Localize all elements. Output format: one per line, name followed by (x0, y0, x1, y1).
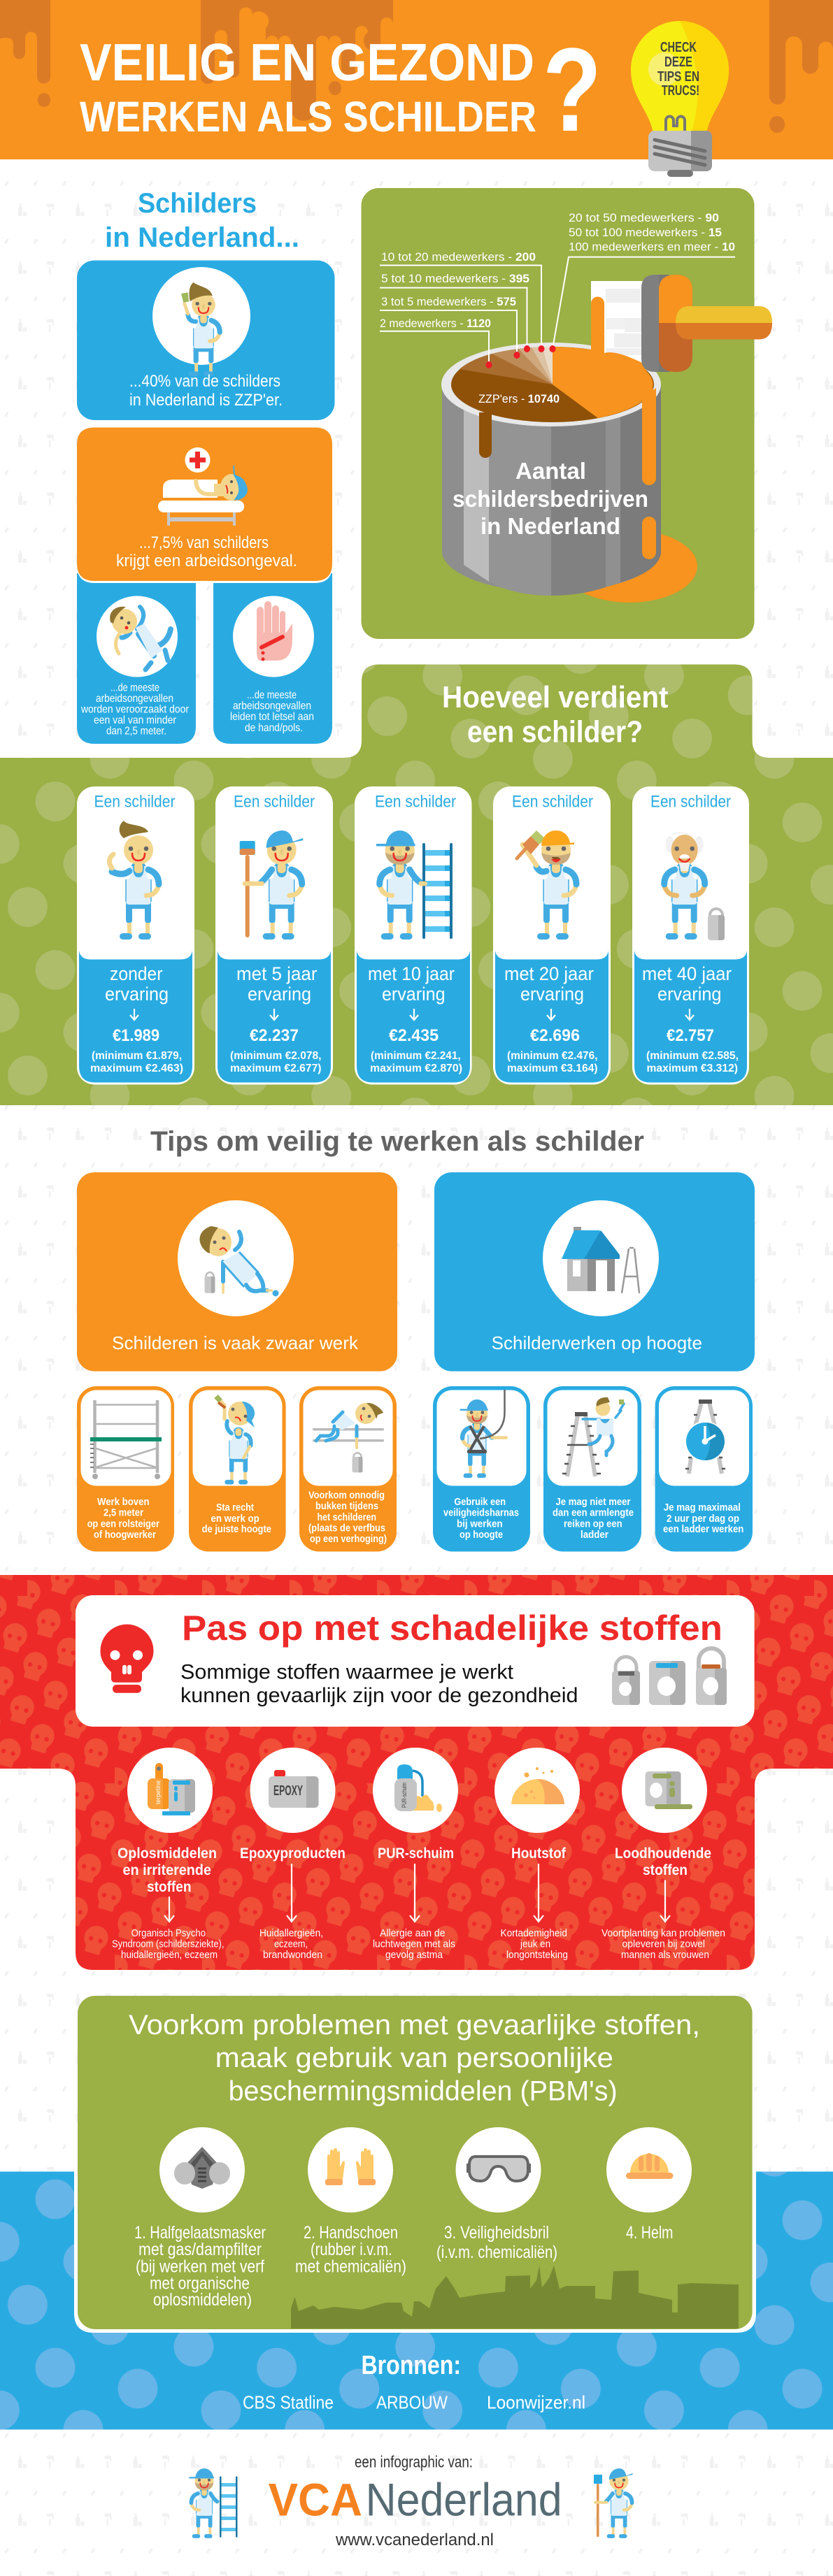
text: mask: met gas/dampfilter (138, 2240, 262, 2259)
card: met 20 jaar (493, 786, 611, 1085)
heading: voorkom problemen: beschermingsmiddelen (PBM's) (229, 2076, 618, 2107)
labels: company sizes (380, 211, 735, 405)
tip card: armlengte (543, 1386, 641, 1552)
text: werk boven (87, 1496, 159, 1541)
card: met 5 jaar: Een schilder (234, 793, 315, 811)
text: salary met 5 jaar: met 5 jaar (236, 963, 318, 984)
icon: half-face mask (174, 2147, 230, 2189)
heading: hoeveel verdient: een schilder? (467, 714, 643, 749)
text: aantal schildersbedrijven: schildersbedrijven (453, 486, 648, 512)
icon: painter reaching up (214, 1395, 255, 1484)
text: loodhoudende: Loodhoudende (615, 1845, 711, 1862)
text: warning (180, 1661, 578, 1707)
text: gloves (295, 2223, 406, 2276)
text: voorkom bukken: bukken tijdens (315, 1500, 378, 1512)
heading: pas op: Pas op met schadelijke stoffen (182, 1609, 722, 1648)
text: hand injuries: de hand/pols. (245, 722, 303, 734)
text: salary zonder ervaring: zonder (110, 963, 163, 984)
text: voorkom bukken (308, 1489, 387, 1545)
text: sources: ARBOUW (376, 2392, 448, 2413)
text: salary met 40 jaar: maximum €3.312) (646, 1063, 738, 1074)
text: sta recht: de juiste hoogte (202, 1523, 271, 1535)
icon: painter with hard hat (517, 830, 576, 940)
text: epoxy: eczeem, (274, 1938, 308, 1950)
title: WERKEN ALS SCHILDER (80, 93, 536, 141)
text: werk boven: Werk boven (97, 1496, 150, 1508)
item: oplosmiddelen (112, 1748, 224, 1961)
text: falls: ...de meeste (111, 682, 159, 693)
light bulb with tips: DEZE (664, 55, 692, 70)
tip card: onnodig bukken (299, 1386, 397, 1552)
text: aantal schildersbedrijven: in Nederland (480, 513, 620, 539)
heading: hoeveel verdient: Hoeveel verdient (442, 680, 669, 714)
text: voorkom bukken: op een verhoging) (310, 1533, 387, 1545)
light bulb with tips: TIPS EN (657, 69, 699, 85)
card: met 5 jaar (215, 786, 333, 1085)
text: werk boven: of hoogwerker (94, 1529, 156, 1541)
icon: painter with harness (460, 1390, 506, 1478)
section: salary band (0, 664, 833, 1105)
text: voorkom bukken: het schilderen (318, 1511, 376, 1523)
text: salary met 20 jaar: met 20 jaar (504, 963, 594, 984)
item: houtstof (494, 1748, 580, 1961)
text: armlengte (553, 1496, 634, 1541)
panel: op hoogte (434, 1172, 755, 1372)
heading: voorkom problemen: maak gebruik van persoonlijke (215, 2043, 613, 2073)
panel: number of companies (361, 188, 772, 639)
text: oplosmiddelen: Oplosmiddelen (118, 1845, 217, 1862)
text: salary zonder ervaring: ervaring (105, 984, 169, 1005)
text: salary met 20 jaar: (minimum €2.476, (507, 1050, 597, 1062)
text: salary met 40 jaar: (minimum €2.585, (646, 1050, 739, 1062)
text: goggles: (i.v.m. chemicaliën) (436, 2243, 557, 2262)
text: salary met 5 jaar: maximum €2.677) (230, 1063, 322, 1074)
logo: VCA Nederland: VCA (269, 2474, 362, 2526)
paint drips (0, 0, 833, 133)
icon: painter with brush (181, 282, 220, 376)
text: mask (134, 2223, 266, 2310)
text: 40 percent (129, 372, 283, 410)
figure: painter with brush (594, 2468, 633, 2538)
labels: company sizes: 100 medewerkers en meer - 10 (569, 240, 735, 253)
text: houtstof: Houtstof (511, 1845, 567, 1862)
card: zonder ervaring: Een schilder (94, 793, 175, 811)
icon: helmet (626, 2153, 673, 2179)
heading: tips: Tips om veilig te werken als schilder (150, 1126, 644, 1157)
text: salary met 10 jaar: met 10 jaar (368, 963, 455, 984)
item: goggles (436, 2127, 557, 2262)
icon: turpentine bottle (148, 1763, 195, 1815)
card: met 40 jaar (632, 786, 749, 1085)
icon: hazardous cans (612, 1648, 727, 1705)
text: salary met 10 jaar: (minimum €2.241, (371, 1050, 461, 1062)
item: gloves (295, 2127, 406, 2276)
item: helmet (606, 2127, 692, 2243)
panel: warning box (76, 1595, 755, 1727)
text: 40 percent: in Nederland is ZZP'er. (129, 391, 283, 410)
icon: epoxy can: EPOXY (273, 1783, 303, 1799)
panel: protective equipment (78, 1996, 753, 2329)
text: oplosmiddelen (112, 1845, 224, 1961)
text: houtstof: longontsteking (506, 1949, 568, 1961)
icon: dust pile (511, 1767, 564, 1804)
labels: company sizes: 20 tot 50 medewerkers - 90 (569, 211, 719, 224)
panel: 7,5% accident (77, 428, 332, 583)
text: salary met 20 jaar: €2.696 (530, 1026, 580, 1045)
text: houtstof (501, 1845, 568, 1961)
text: PUR (373, 1845, 455, 1961)
icon: gloves (325, 2148, 376, 2185)
tip card: juiste hoogte (189, 1386, 286, 1552)
heading: Schilders in Nederland (105, 188, 299, 253)
text: oplosmiddelen: en irriterende (123, 1862, 211, 1878)
text: salary met 5 jaar: ervaring (248, 984, 311, 1005)
text: website: www.vcanederland.nl (335, 2531, 494, 2549)
card: zonder ervaring (77, 786, 194, 1085)
text: PUR: PUR-schuim (378, 1845, 454, 1862)
text: falls: een val van minder (94, 714, 177, 726)
text: harnas: op hoogte (460, 1529, 503, 1541)
text: salary met 20 jaar (504, 963, 597, 1074)
text: loodhoudende (601, 1845, 725, 1961)
text: salary met 40 jaar: met 40 jaar (642, 963, 732, 984)
icon: lead can (645, 1771, 692, 1809)
text: 2 uur per dag: een ladder werken (663, 1523, 743, 1535)
text: harnas (443, 1496, 519, 1541)
text: oplosmiddelen: stoffen (147, 1879, 192, 1895)
icon: painter on bed (158, 466, 248, 526)
icon: old painter with bucket (664, 833, 725, 940)
text: 2 uur per dag: 2 uur per dag op (667, 1513, 739, 1525)
text: mask: 1. Halfgelaatsmasker (134, 2223, 266, 2243)
text: 7,5 percent: ...7,5% van schilders (139, 533, 269, 552)
icon: scaffold (90, 1400, 162, 1479)
icon: painter with ladder (376, 830, 453, 940)
text: hand injuries: arbeidsongevallen (233, 700, 311, 712)
text: salary met 40 jaar: €2.757 (667, 1026, 714, 1045)
light bulb with tips (631, 21, 729, 177)
text: salary met 40 jaar: ervaring (657, 984, 722, 1005)
section: sources band (0, 2171, 833, 2430)
leader lines (380, 257, 735, 365)
labels: company sizes: 10 tot 20 medewerkers - 200 (381, 250, 536, 264)
skyline (291, 2266, 739, 2329)
tip card: rolsteiger (77, 1386, 174, 1552)
labels: company sizes: 3 tot 5 medewerkers - 575 (381, 295, 516, 308)
text: hand injuries (230, 689, 314, 734)
icon: ladder with clock (685, 1399, 725, 1474)
icon: epoxy can (269, 1770, 319, 1808)
heading: voorkom problemen (129, 2010, 700, 2107)
text: 2 uur per dag (663, 1502, 743, 1535)
text: salary zonder ervaring: (minimum €1.879, (92, 1050, 182, 1062)
labels: company sizes: 5 tot 10 medewerkers - 395 (381, 272, 529, 285)
text: salary met 10 jaar: maximum €2.870) (370, 1063, 462, 1074)
chart: paint bucket pie (441, 343, 697, 603)
text: harnas: bij werken (457, 1518, 503, 1530)
footer logo block (189, 2452, 633, 2549)
heading: Schilders in Nederland: in Nederland... (105, 222, 299, 253)
text: warning: Sommige stoffen waarmee je werkt (180, 1661, 514, 1683)
text: salary met 20 jaar: ervaring (520, 984, 584, 1005)
text: PUR: Allergie aan de (380, 1927, 445, 1939)
icon: injured hand (257, 601, 292, 661)
icon: young painter (109, 821, 159, 940)
text: hand injuries: ...de meeste (247, 689, 297, 701)
icon: skull (101, 1625, 154, 1693)
light bulb with tips: CHECK (660, 40, 697, 55)
text: PUR: gevolg astma (385, 1949, 443, 1961)
panel: 40% ZZP (77, 260, 334, 420)
text: 7,5 percent (116, 533, 297, 570)
text: armlengte: ladder (581, 1529, 608, 1541)
text: 2 uur per dag: Je mag maximaal (664, 1502, 741, 1513)
text: epoxy (240, 1845, 346, 1961)
text: houtstof: Kortademigheid (501, 1927, 567, 1939)
figure: painter with ladder (189, 2468, 238, 2538)
labels: company sizes: 2 medewerkers - 1120 (380, 317, 491, 330)
text: zwaar werk: Schilderen is vaak zwaar werk (112, 1332, 359, 1353)
text: loodhoudende: Voortplanting kan problemen (601, 1927, 725, 1939)
text: salary met 10 jaar: ervaring (382, 984, 445, 1005)
icon: house with ladder (562, 1227, 639, 1293)
text: armlengte: Je mag niet meer (555, 1496, 631, 1508)
text: oplosmiddelen: Organisch Psycho (131, 1927, 206, 1939)
heading: voorkom problemen: Voorkom problemen met gevaarlijke stoffen, (129, 2010, 700, 2041)
text: werk boven: 2,5 meter (104, 1507, 143, 1519)
text: salary met 20 jaar: maximum €3.164) (507, 1063, 597, 1074)
text: goggles (436, 2223, 557, 2262)
text: 40 percent: ...40% van de schilders (129, 372, 280, 391)
text: aantal schildersbedrijven (453, 458, 648, 539)
heading: hoeveel verdient (442, 680, 669, 749)
icon: foam can: PUR-schuim (401, 1783, 408, 1808)
panel: zwaar werk (77, 1172, 397, 1372)
card: met 10 jaar (355, 786, 471, 1085)
text: armlengte: reiken op een (564, 1518, 622, 1530)
text: gloves: (rubber i.v.m. (311, 2240, 392, 2259)
icon: turpentine bottle: terpetine (155, 1780, 162, 1804)
header banner (0, 0, 833, 177)
item: loodhoudende (601, 1748, 725, 1961)
text: hand injuries: leiden tot letsel aan (230, 711, 314, 723)
text: mask: oplosmiddelen) (153, 2290, 252, 2310)
text: salary met 5 jaar (230, 963, 322, 1074)
text: falls: dan 2,5 meter. (106, 726, 166, 737)
text: salary zonder ervaring (90, 963, 183, 1074)
labels: company sizes: ZZP'ers - 10740 (478, 392, 560, 405)
title: VEILIG EN GEZOND (80, 33, 534, 92)
text: helmet: 4. Helm (626, 2223, 673, 2243)
text: credit: een infographic van: (355, 2452, 473, 2470)
text: werk boven: op een rolsteiger (87, 1518, 159, 1530)
text: gloves: 2. Handschoen (304, 2223, 398, 2243)
text: 7,5 percent: krijgt een arbeidsongeval. (116, 552, 297, 570)
logo: VCA Nederland (269, 2474, 562, 2526)
text: sources: CBS Statline (243, 2392, 334, 2413)
icon: first aid cross (185, 447, 210, 473)
text: mask: met organische (150, 2273, 250, 2293)
text: armlengte: dan een armlengte (553, 1507, 634, 1519)
card: met 40 jaar: Een schilder (650, 793, 731, 811)
item: epoxy (240, 1748, 346, 1961)
card: met 20 jaar: Een schilder (512, 793, 593, 811)
text: epoxy: brandwonden (263, 1949, 322, 1961)
text: falls: arbeidsongevallen (96, 693, 173, 705)
icon: falling painter (110, 607, 171, 670)
text: sta recht: en werk op (211, 1513, 259, 1525)
text: falls: worden veroorzaakt door (80, 704, 190, 716)
question mark: ? (543, 24, 601, 157)
tip card: harnas (433, 1386, 530, 1552)
text: loodhoudende: opleveren bij zowel (622, 1938, 705, 1950)
text: epoxy: Epoxyproducten (240, 1845, 346, 1862)
text: salary zonder ervaring: maximum €2.463) (90, 1063, 183, 1074)
text: warning: kunnen gevaarlijk zijn voor de gezondheid (180, 1684, 578, 1707)
text: goggles: 3. Veiligheidsbril (444, 2223, 549, 2243)
text: sta recht: Sta recht (216, 1502, 254, 1513)
icon: bending painter (313, 1403, 384, 1472)
text: salary zonder ervaring: €1.989 (113, 1026, 159, 1045)
text: hoogte: Schilderwerken op hoogte (492, 1332, 702, 1353)
pie markers (485, 345, 555, 368)
text: aantal schildersbedrijven: Aantal (515, 458, 586, 484)
card: met 10 jaar: Een schilder (375, 793, 456, 811)
text: voorkom bukken: Voorkom onnodig (308, 1489, 385, 1502)
text: gloves: met chemicaliën) (295, 2257, 406, 2276)
light bulb with tips: TRUCS! (662, 83, 699, 99)
icon: foam can (394, 1764, 442, 1812)
text: epoxy: Huidallergieën, (259, 1927, 323, 1939)
text: loodhoudende: mannen als vrouwen (621, 1949, 709, 1961)
text: oplosmiddelen: Syndroom (schildersziekte), (112, 1938, 224, 1950)
title (80, 33, 536, 141)
text: falls (80, 682, 190, 737)
logo: VCA Nederland: Nederland (366, 2474, 562, 2526)
icon: paint roller (553, 275, 772, 418)
icon: tired painter (200, 1226, 278, 1296)
icon: painter with long brush (240, 830, 304, 940)
labels: company sizes: 50 tot 100 medewerkers - 15 (569, 226, 722, 239)
section: harmful substances (0, 1575, 833, 1970)
heading: bronnen: Bronnen: (361, 2351, 461, 2380)
icon: safety goggles (467, 2157, 531, 2181)
text: salary met 5 jaar: (minimum €2.078, (230, 1050, 322, 1062)
text: houtstof: jeuk en (520, 1938, 550, 1950)
text: salary met 5 jaar: €2.237 (250, 1026, 299, 1045)
text: harnas: Gebruik een (454, 1496, 506, 1508)
text: oplosmiddelen: huidallergieën, eczeem (121, 1949, 218, 1961)
text: salary met 10 jaar: €2.435 (389, 1026, 439, 1045)
text: voorkom bukken: (plaats de verfbus (308, 1523, 385, 1534)
text: harnas: veiligheidsharnas (443, 1507, 519, 1519)
text: salary met 40 jaar (642, 963, 739, 1074)
text: loodhoudende: stoffen (643, 1862, 688, 1878)
text: PUR: luchtwegen met als (373, 1938, 455, 1950)
tip card: 2 uur per dag (655, 1386, 753, 1552)
item: mask (134, 2127, 266, 2310)
text: mask: (bij werken met verf (136, 2257, 264, 2276)
heading: Schilders in Nederland: Schilders (138, 188, 257, 219)
text: sources (243, 2392, 585, 2413)
text: salary met 10 jaar (368, 963, 462, 1074)
panel: hand and fall accidents (77, 573, 332, 744)
item: PUR (373, 1748, 458, 1961)
icon: painter on ladder (562, 1397, 624, 1476)
text: sources: Loonwijzer.nl (487, 2392, 585, 2413)
text: sta recht (202, 1502, 271, 1535)
